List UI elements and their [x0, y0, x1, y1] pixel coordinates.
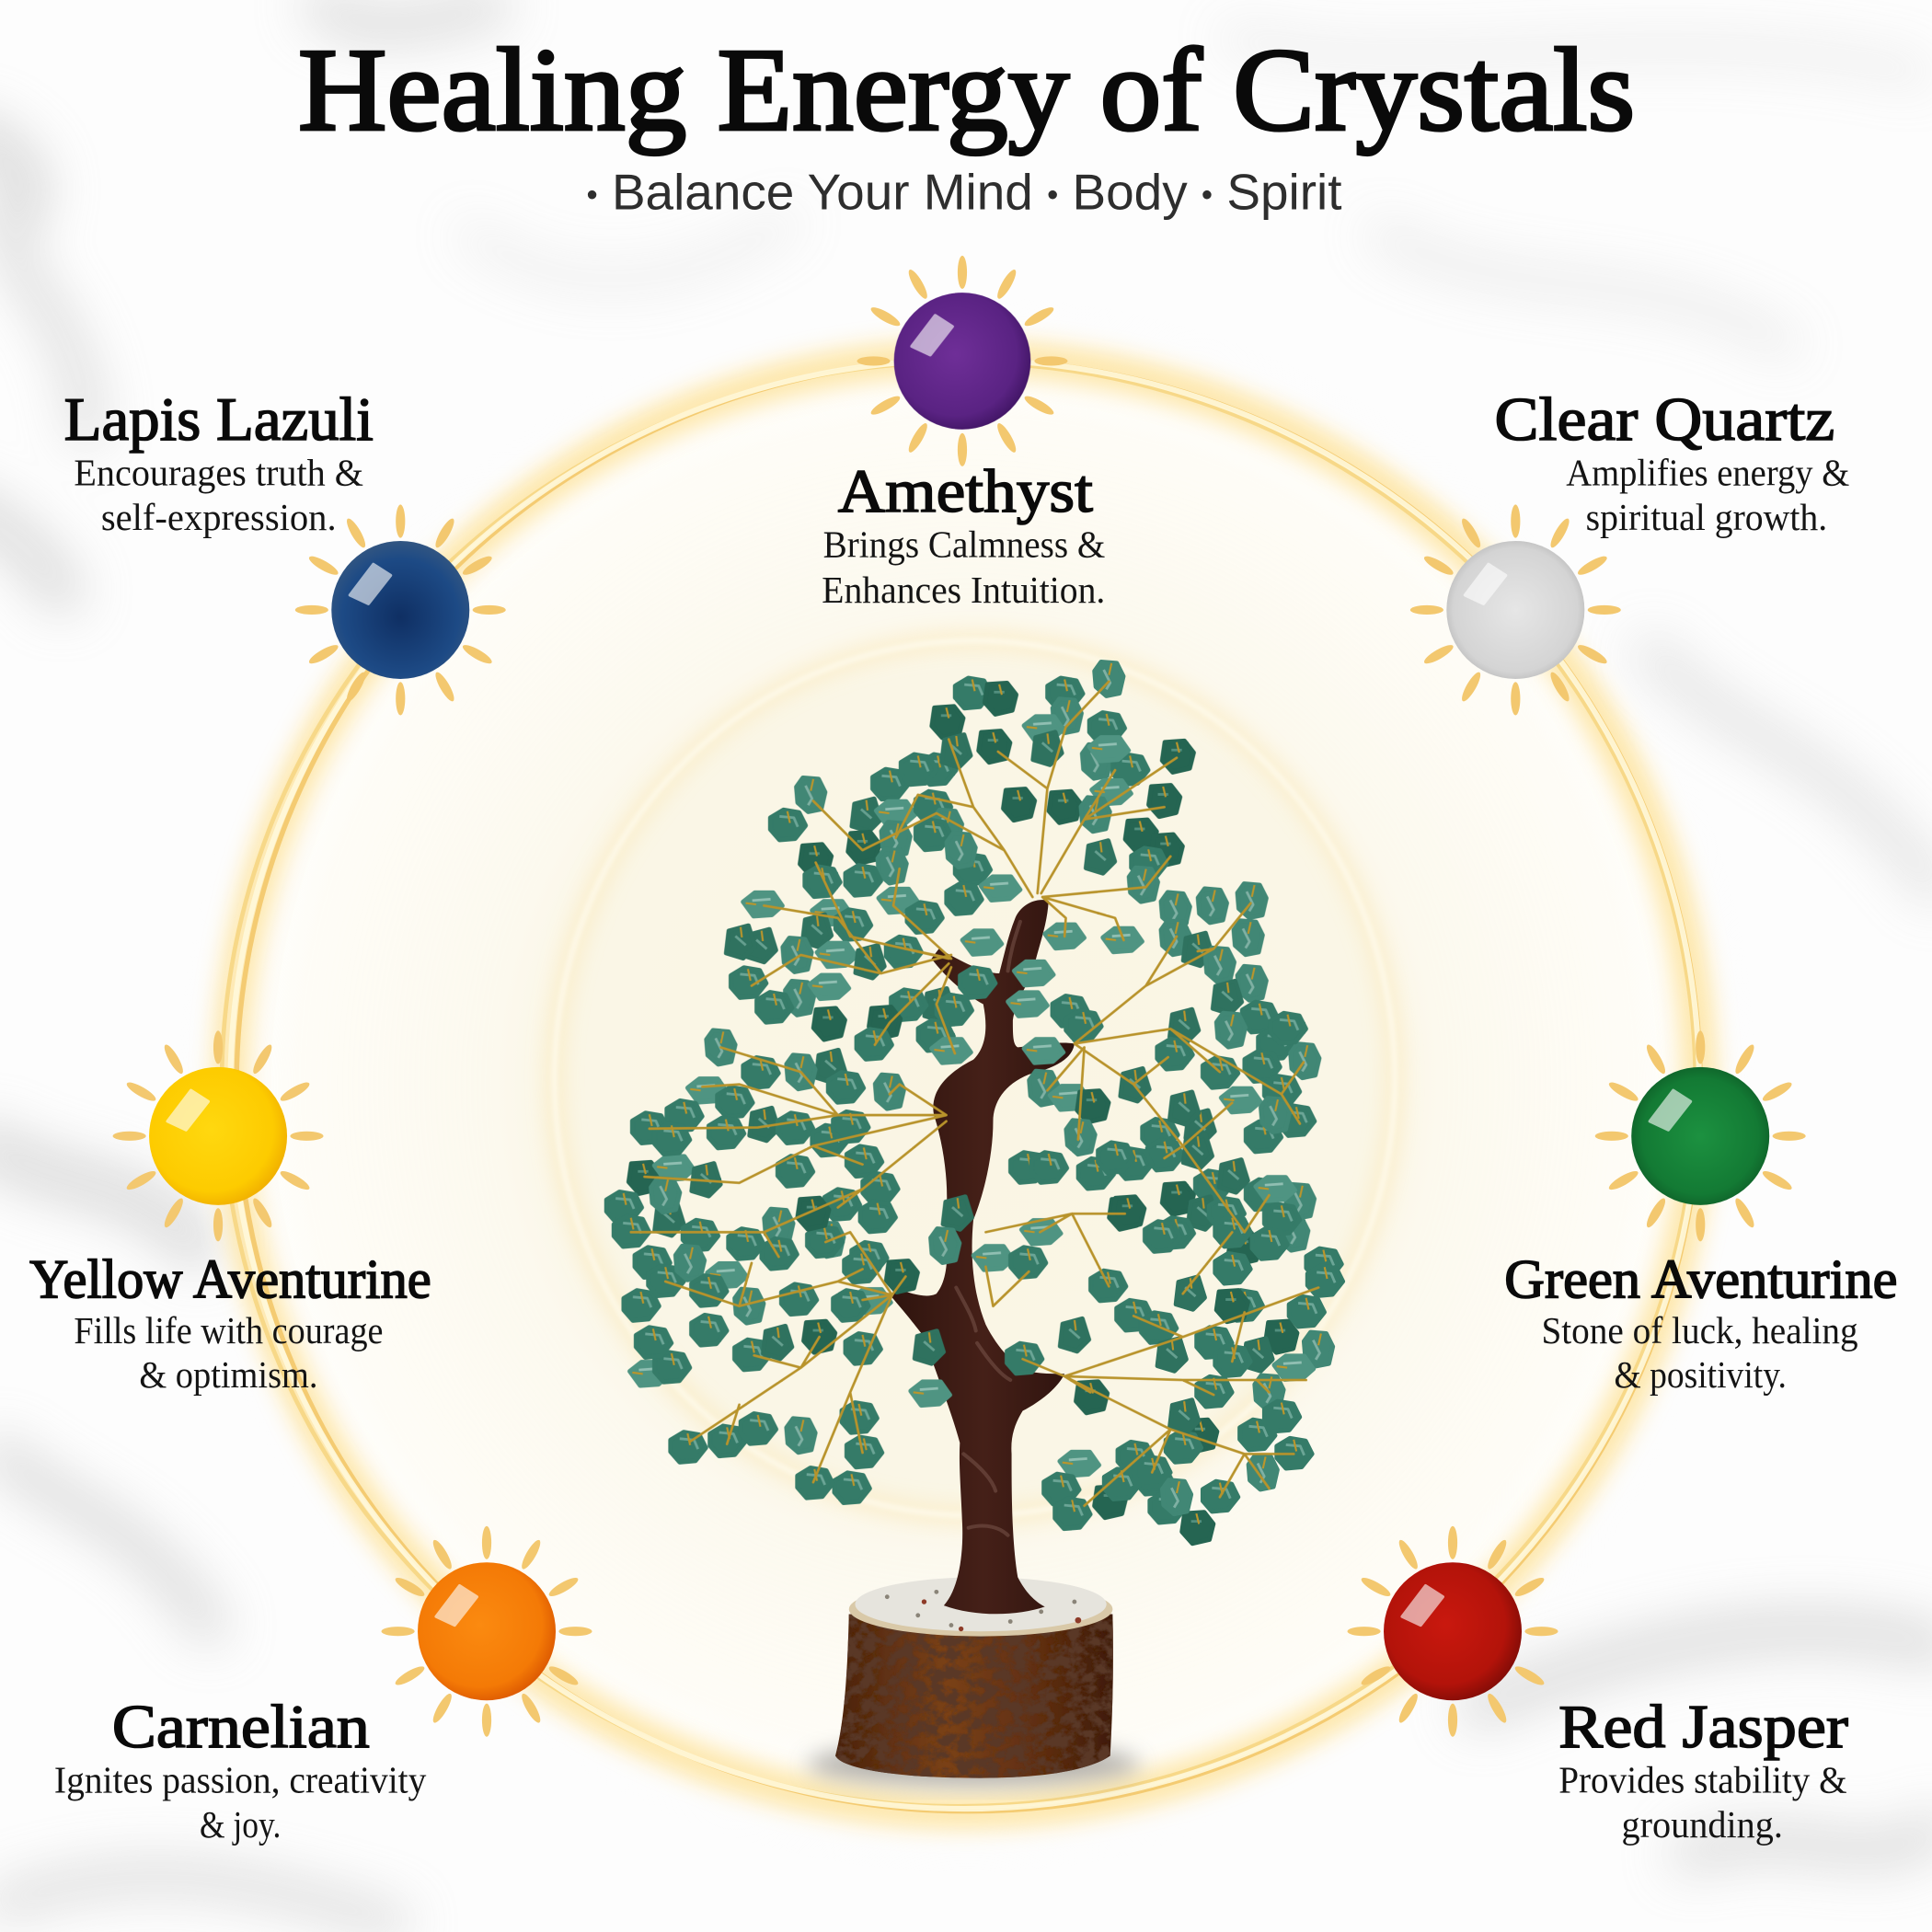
trunk highlights	[956, 922, 1020, 1535]
icon: amethyst sphere	[857, 256, 1067, 466]
icon: yellow aventurine sphere	[113, 1030, 324, 1241]
subtitle: Spirit	[1213, 164, 1341, 221]
wooden stump base	[835, 1614, 1113, 1778]
panel: lapis lazuli	[64, 385, 506, 715]
stump shadow	[807, 1742, 1140, 1787]
red jasper description: grounding.	[1621, 1803, 1783, 1846]
subtitle: Balance Your Mind	[598, 164, 1047, 221]
carnelian description: Ignites passion, creativity	[54, 1759, 427, 1801]
panel: amethyst	[822, 256, 1105, 611]
panel: yellow aventurine	[29, 1030, 431, 1396]
amethyst description: Enhances Intuition.	[822, 569, 1105, 611]
panel: carnelian	[54, 1526, 592, 1846]
panel: clear quartz	[1410, 385, 1849, 715]
icon: lapis lazuli sphere	[295, 504, 506, 715]
lapis lazuli name: Lapis Lazuli	[64, 385, 374, 454]
clear quartz description: spiritual growth.	[1586, 496, 1827, 538]
subtitle: •	[1047, 178, 1058, 213]
icon: red jasper sphere	[1348, 1526, 1558, 1737]
carnelian description: & joy.	[200, 1803, 281, 1846]
subtitle: Body	[1058, 164, 1202, 221]
amethyst name: Amethyst	[838, 457, 1093, 525]
gravel top	[849, 1577, 1112, 1637]
trunk	[892, 900, 1075, 1614]
icon: carnelian sphere	[382, 1526, 592, 1737]
crystal leaves	[606, 661, 1343, 1544]
red jasper name: Red Jasper	[1558, 1693, 1848, 1761]
subtitle: •	[1202, 178, 1213, 213]
green aventurine description: & positivity.	[1614, 1353, 1787, 1396]
panel: green aventurine	[1504, 1030, 1897, 1396]
yellow aventurine description: & optimism.	[139, 1353, 318, 1396]
outer golden ring	[222, 357, 1700, 1811]
green aventurine description: Stone of luck, healing	[1541, 1309, 1858, 1351]
clear quartz name: Clear Quartz	[1495, 385, 1834, 454]
yellow aventurine description: Fills life with courage	[74, 1309, 384, 1351]
inner glowing ring	[555, 640, 1395, 1515]
subtitle: •	[587, 178, 598, 213]
carnelian name: Carnelian	[112, 1693, 370, 1761]
gold wire branches	[631, 682, 1318, 1506]
title: Healing Energy of Crystals	[298, 24, 1635, 155]
panel: red jasper	[1348, 1526, 1848, 1846]
green aventurine name: Green Aventurine	[1504, 1248, 1898, 1310]
crystal tree	[606, 661, 1343, 1787]
red jasper description: Provides stability &	[1558, 1759, 1847, 1801]
yellow aventurine name: Yellow Aventurine	[29, 1248, 431, 1310]
lapis lazuli description: self-expression.	[101, 496, 337, 538]
icon: clear quartz sphere	[1410, 504, 1621, 715]
clear quartz description: Amplifies energy &	[1566, 452, 1849, 494]
amethyst description: Brings Calmness &	[823, 523, 1105, 565]
lapis lazuli description: Encourages truth &	[74, 452, 363, 494]
icon: green aventurine sphere	[1595, 1030, 1806, 1241]
